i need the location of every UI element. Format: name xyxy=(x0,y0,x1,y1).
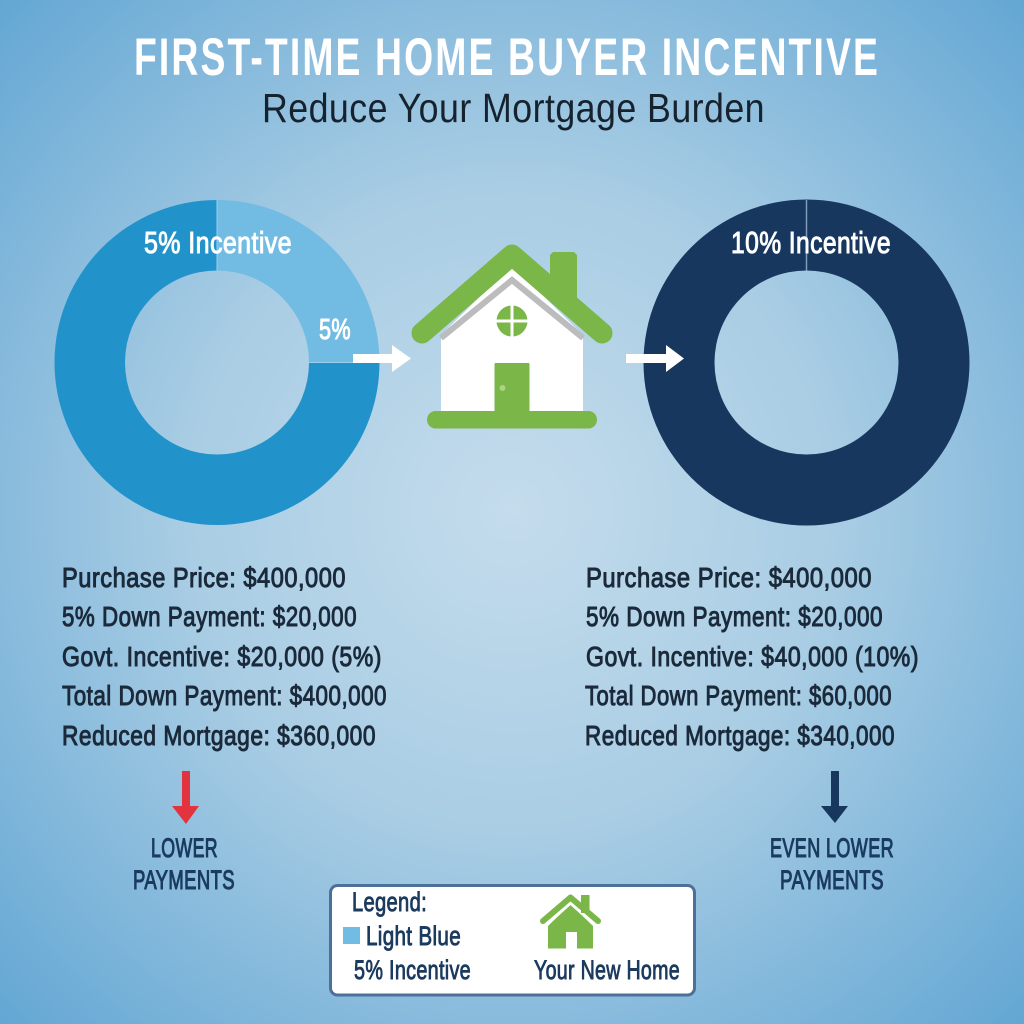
donut chart: 10% incentive xyxy=(644,199,970,525)
text block: 5% scenario figures: Purchase Price: $400,000 xyxy=(62,562,346,593)
text block: 5% scenario figures: Reduced Mortgage: $360,000 xyxy=(62,720,376,751)
arrow: house to right donut xyxy=(626,345,684,372)
panel: legend xyxy=(330,886,694,995)
arrow: red down xyxy=(172,771,199,824)
text block: 5% scenario figures: Total Down Payment: $400,000 xyxy=(62,680,387,711)
legend label: your new home: Your New Home xyxy=(534,955,680,985)
donut chart: 5% incentive xyxy=(54,200,380,525)
legend label: light blue: Light Blue xyxy=(366,921,461,951)
text block: 10% scenario figures xyxy=(585,562,919,751)
arrow: left donut to house xyxy=(353,345,411,372)
text block: 10% scenario figures: 5% Down Payment: $20,000 xyxy=(586,601,883,632)
legend swatch: light blue xyxy=(343,927,360,944)
legend label: 5% incentive: 5% Incentive xyxy=(354,955,471,985)
donut chart: 5% incentive: 5% Incentive xyxy=(144,225,292,260)
donut chart: 5% incentive: 5% xyxy=(319,314,351,346)
text block: 10% scenario figures: Govt. Incentive: $40,000 (10%) xyxy=(586,641,919,672)
icon: legend house xyxy=(543,895,598,948)
subtitle: Reduce Your Mortgage Burden xyxy=(262,85,765,131)
arrow: navy down xyxy=(821,771,848,823)
text block: 5% scenario figures: Govt. Incentive: $20,000 (5%) xyxy=(62,641,382,672)
legend heading: Legend: xyxy=(352,887,427,917)
text block: 5% scenario figures xyxy=(62,562,387,751)
label: lower payments xyxy=(133,833,235,895)
text block: 5% scenario figures: 5% Down Payment: $20,000 xyxy=(62,601,357,632)
text block: 10% scenario figures: Purchase Price: $400,000 xyxy=(586,562,872,593)
text block: 10% scenario figures: Total Down Payment: $60,000 xyxy=(585,680,892,711)
label: lower payments: PAYMENTS xyxy=(133,865,235,895)
label: even lower payments: PAYMENTS xyxy=(780,865,884,895)
label: even lower payments xyxy=(770,833,894,895)
label: even lower payments: EVEN LOWER xyxy=(770,833,894,863)
donut chart: 10% incentive: 10% Incentive xyxy=(731,225,891,260)
text block: 10% scenario figures: Reduced Mortgage: $340,000 xyxy=(585,720,895,751)
icon: house xyxy=(422,252,602,428)
label: lower payments: LOWER xyxy=(151,833,218,863)
